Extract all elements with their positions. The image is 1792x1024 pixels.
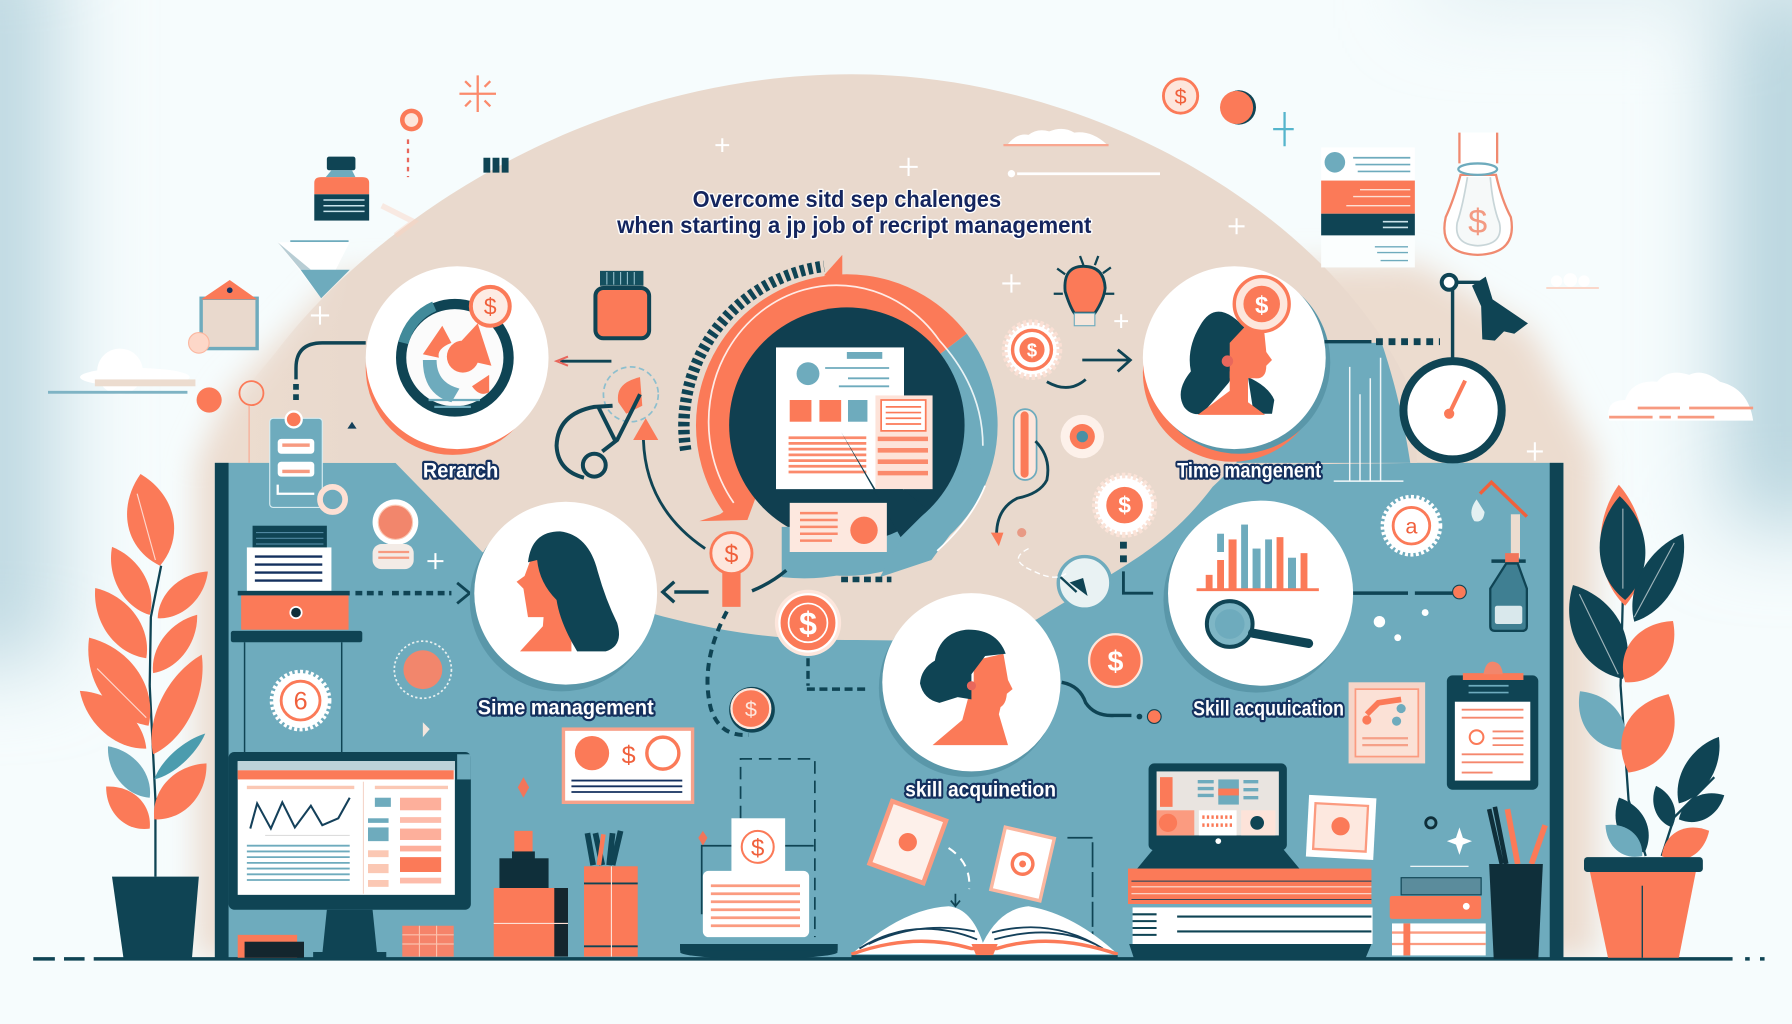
- circle: sime management: [470, 502, 657, 691]
- icon: small poster: [1306, 795, 1376, 860]
- icon: funnel: [278, 241, 350, 298]
- icon: faded chevron: [382, 206, 414, 235]
- icon: spiral coin: [729, 687, 775, 733]
- icon: teal plus: [1273, 112, 1294, 146]
- icon: clipboard tag: [270, 411, 357, 512]
- circle: analytics: [1163, 501, 1353, 693]
- icon: sparkle star: [459, 75, 496, 112]
- icon: desk lamp and gauge: [1403, 275, 1528, 459]
- icon: small white triangle: [423, 722, 430, 737]
- connector: analytics right: [1353, 585, 1466, 599]
- doc: main receipt: [776, 347, 904, 489]
- icon: pin coin: [711, 533, 752, 607]
- plant: left: [70, 469, 219, 958]
- plus marks: [311, 138, 1543, 569]
- icon: poster chart: [1349, 682, 1425, 763]
- connector: time to lamp: [1325, 340, 1440, 343]
- connector: arc strokes: [752, 570, 786, 591]
- icon: hanging bulb: [1444, 133, 1512, 255]
- icon: coin: $: [1175, 84, 1187, 109]
- label: sime: Sime management: [478, 694, 654, 719]
- icon: gear coin letter: [1384, 498, 1439, 553]
- connector: research to clipboard: [296, 343, 366, 402]
- icon: small coin with pin: [400, 109, 423, 177]
- bottom floor area: [0, 959, 1792, 1024]
- icon: small ring and sparkle: [1426, 818, 1472, 855]
- icon: dotted coral circle: [394, 641, 451, 698]
- title: [616, 186, 1092, 238]
- top cloud: [1003, 129, 1160, 177]
- icon: paperclip: [1014, 409, 1037, 480]
- icon: badge and pill: [373, 499, 418, 569]
- icon: woman head long hair: [517, 531, 619, 651]
- icon: gear coin: [1005, 322, 1059, 377]
- label: skill acquuication: Skill acquuication: [1193, 695, 1344, 720]
- icon: flower: [1061, 415, 1104, 458]
- pot: [1584, 857, 1703, 958]
- connector: skill squiggle: [1062, 682, 1161, 723]
- connector: coin to skill: [807, 658, 866, 689]
- icon: coin: [1234, 277, 1289, 331]
- doc: secondary receipt: [875, 395, 933, 489]
- hash arc: [684, 266, 824, 450]
- icon: gear coin letter: a: [1405, 514, 1418, 539]
- icon: large coin: [775, 590, 841, 656]
- dashed under ring: [841, 577, 891, 582]
- icon: receipt machine: $: [751, 835, 764, 862]
- icon: gear coin 6: 6: [294, 688, 308, 716]
- icon: pencil cup: [584, 831, 638, 957]
- panel: blue desk wall: [215, 463, 1563, 958]
- books: [1128, 869, 1373, 958]
- dark disc: [729, 307, 965, 543]
- icon: framed tag: [189, 280, 257, 353]
- large right cloud: [1608, 373, 1753, 421]
- icon: small book stack: [1390, 866, 1486, 955]
- icon: open book: [851, 906, 1118, 958]
- icon: coin: [471, 287, 510, 326]
- arrow: to sime: [663, 582, 709, 602]
- circle: time management: [1143, 266, 1330, 462]
- circle: research: [366, 266, 549, 455]
- icon: coral dot: [1220, 90, 1256, 125]
- icon: bulb: [1054, 256, 1114, 326]
- icon: woman with bun: [920, 630, 1013, 745]
- icon: scissors: [557, 367, 705, 549]
- icon: magnifier: [1207, 601, 1309, 647]
- icon: coin: $: [1255, 292, 1269, 319]
- connector: shelf to person: [355, 583, 470, 603]
- label: research: Rerarch: [423, 458, 498, 483]
- icon: clipboard: [1447, 662, 1538, 790]
- icon: gear coin 6: [273, 673, 328, 728]
- icon: hanging bulb: $: [1468, 203, 1487, 241]
- circle: skill acquisition person: [879, 593, 1061, 777]
- icon: dollar bill: [563, 729, 693, 802]
- icon: pin coin: $: [724, 540, 738, 568]
- icon: bottle and box: [494, 831, 568, 957]
- chart: central ring: [684, 255, 985, 578]
- decorative top left icons: [48, 75, 1543, 569]
- icon: dollar bill: $: [622, 741, 636, 769]
- icon: lamp bottle: [1471, 482, 1527, 631]
- connector: dashed to spiral coin: [707, 611, 749, 735]
- small right cloud: [1546, 273, 1599, 288]
- coral arc: [699, 255, 953, 521]
- blue arc: [823, 344, 980, 559]
- icon: coral coin: [1089, 634, 1142, 687]
- chart: thin white bars: [1334, 358, 1403, 481]
- doc: top right card: [1321, 147, 1415, 267]
- stack: printer and drawer shelf: [231, 526, 362, 754]
- icon: jar: [595, 271, 649, 338]
- blue base: [782, 527, 880, 578]
- icon: gear coin right: $: [1118, 492, 1131, 518]
- panel: blue patch behind time circle: [1237, 343, 1410, 463]
- arrow: to time: [1047, 350, 1130, 387]
- label: skill acquinetion: skill acquinetion: [905, 777, 1056, 802]
- monitor: [229, 752, 471, 958]
- line chart: [250, 798, 350, 829]
- title: when starting a jp job of recript management: [616, 212, 1092, 238]
- icon: ink bottle: [314, 157, 369, 221]
- icon: laptop on books: [1128, 763, 1373, 958]
- icon: spiral coin: $: [745, 697, 757, 722]
- icon: large coin: $: [799, 605, 817, 641]
- blue wedge lower right: [880, 455, 974, 577]
- top right coins: [1163, 79, 1294, 146]
- gauge: [1403, 361, 1502, 459]
- panel: beige dome: [234, 74, 1417, 641]
- title: Overcome sitd sep chalenges: [693, 186, 1001, 212]
- icon: receipt machine: [680, 759, 838, 959]
- card: [790, 503, 887, 552]
- icon: donut chart: [401, 304, 509, 411]
- connector: L dotted: [1123, 542, 1153, 593]
- pointer: [841, 432, 928, 537]
- icon: three bars: [483, 158, 509, 173]
- icon: woman head side: [1181, 312, 1274, 415]
- icon: left cloud: [48, 349, 195, 394]
- plant: right: [1552, 484, 1731, 958]
- icon: tilted bills: [870, 801, 1093, 944]
- clouds: [1003, 129, 1753, 421]
- icon: gear coin: $: [1027, 340, 1037, 361]
- icon: right pen cup: [1489, 807, 1545, 959]
- icon: dot and ring: [197, 381, 263, 463]
- label: time: Time mangenent: [1177, 458, 1321, 483]
- icon: coin: $: [484, 293, 497, 319]
- icon: gear coin right: [1095, 475, 1154, 535]
- ground line: [33, 957, 1765, 960]
- arrow: to research: [557, 357, 611, 366]
- icon: compass: [1018, 549, 1111, 609]
- icon: coral coin: $: [1107, 646, 1123, 678]
- icon: diamonds: [518, 777, 707, 846]
- small desk objects: [238, 926, 454, 958]
- bar chart: [1197, 525, 1319, 590]
- curve squiggle: [991, 441, 1048, 546]
- small dots: [1374, 609, 1429, 641]
